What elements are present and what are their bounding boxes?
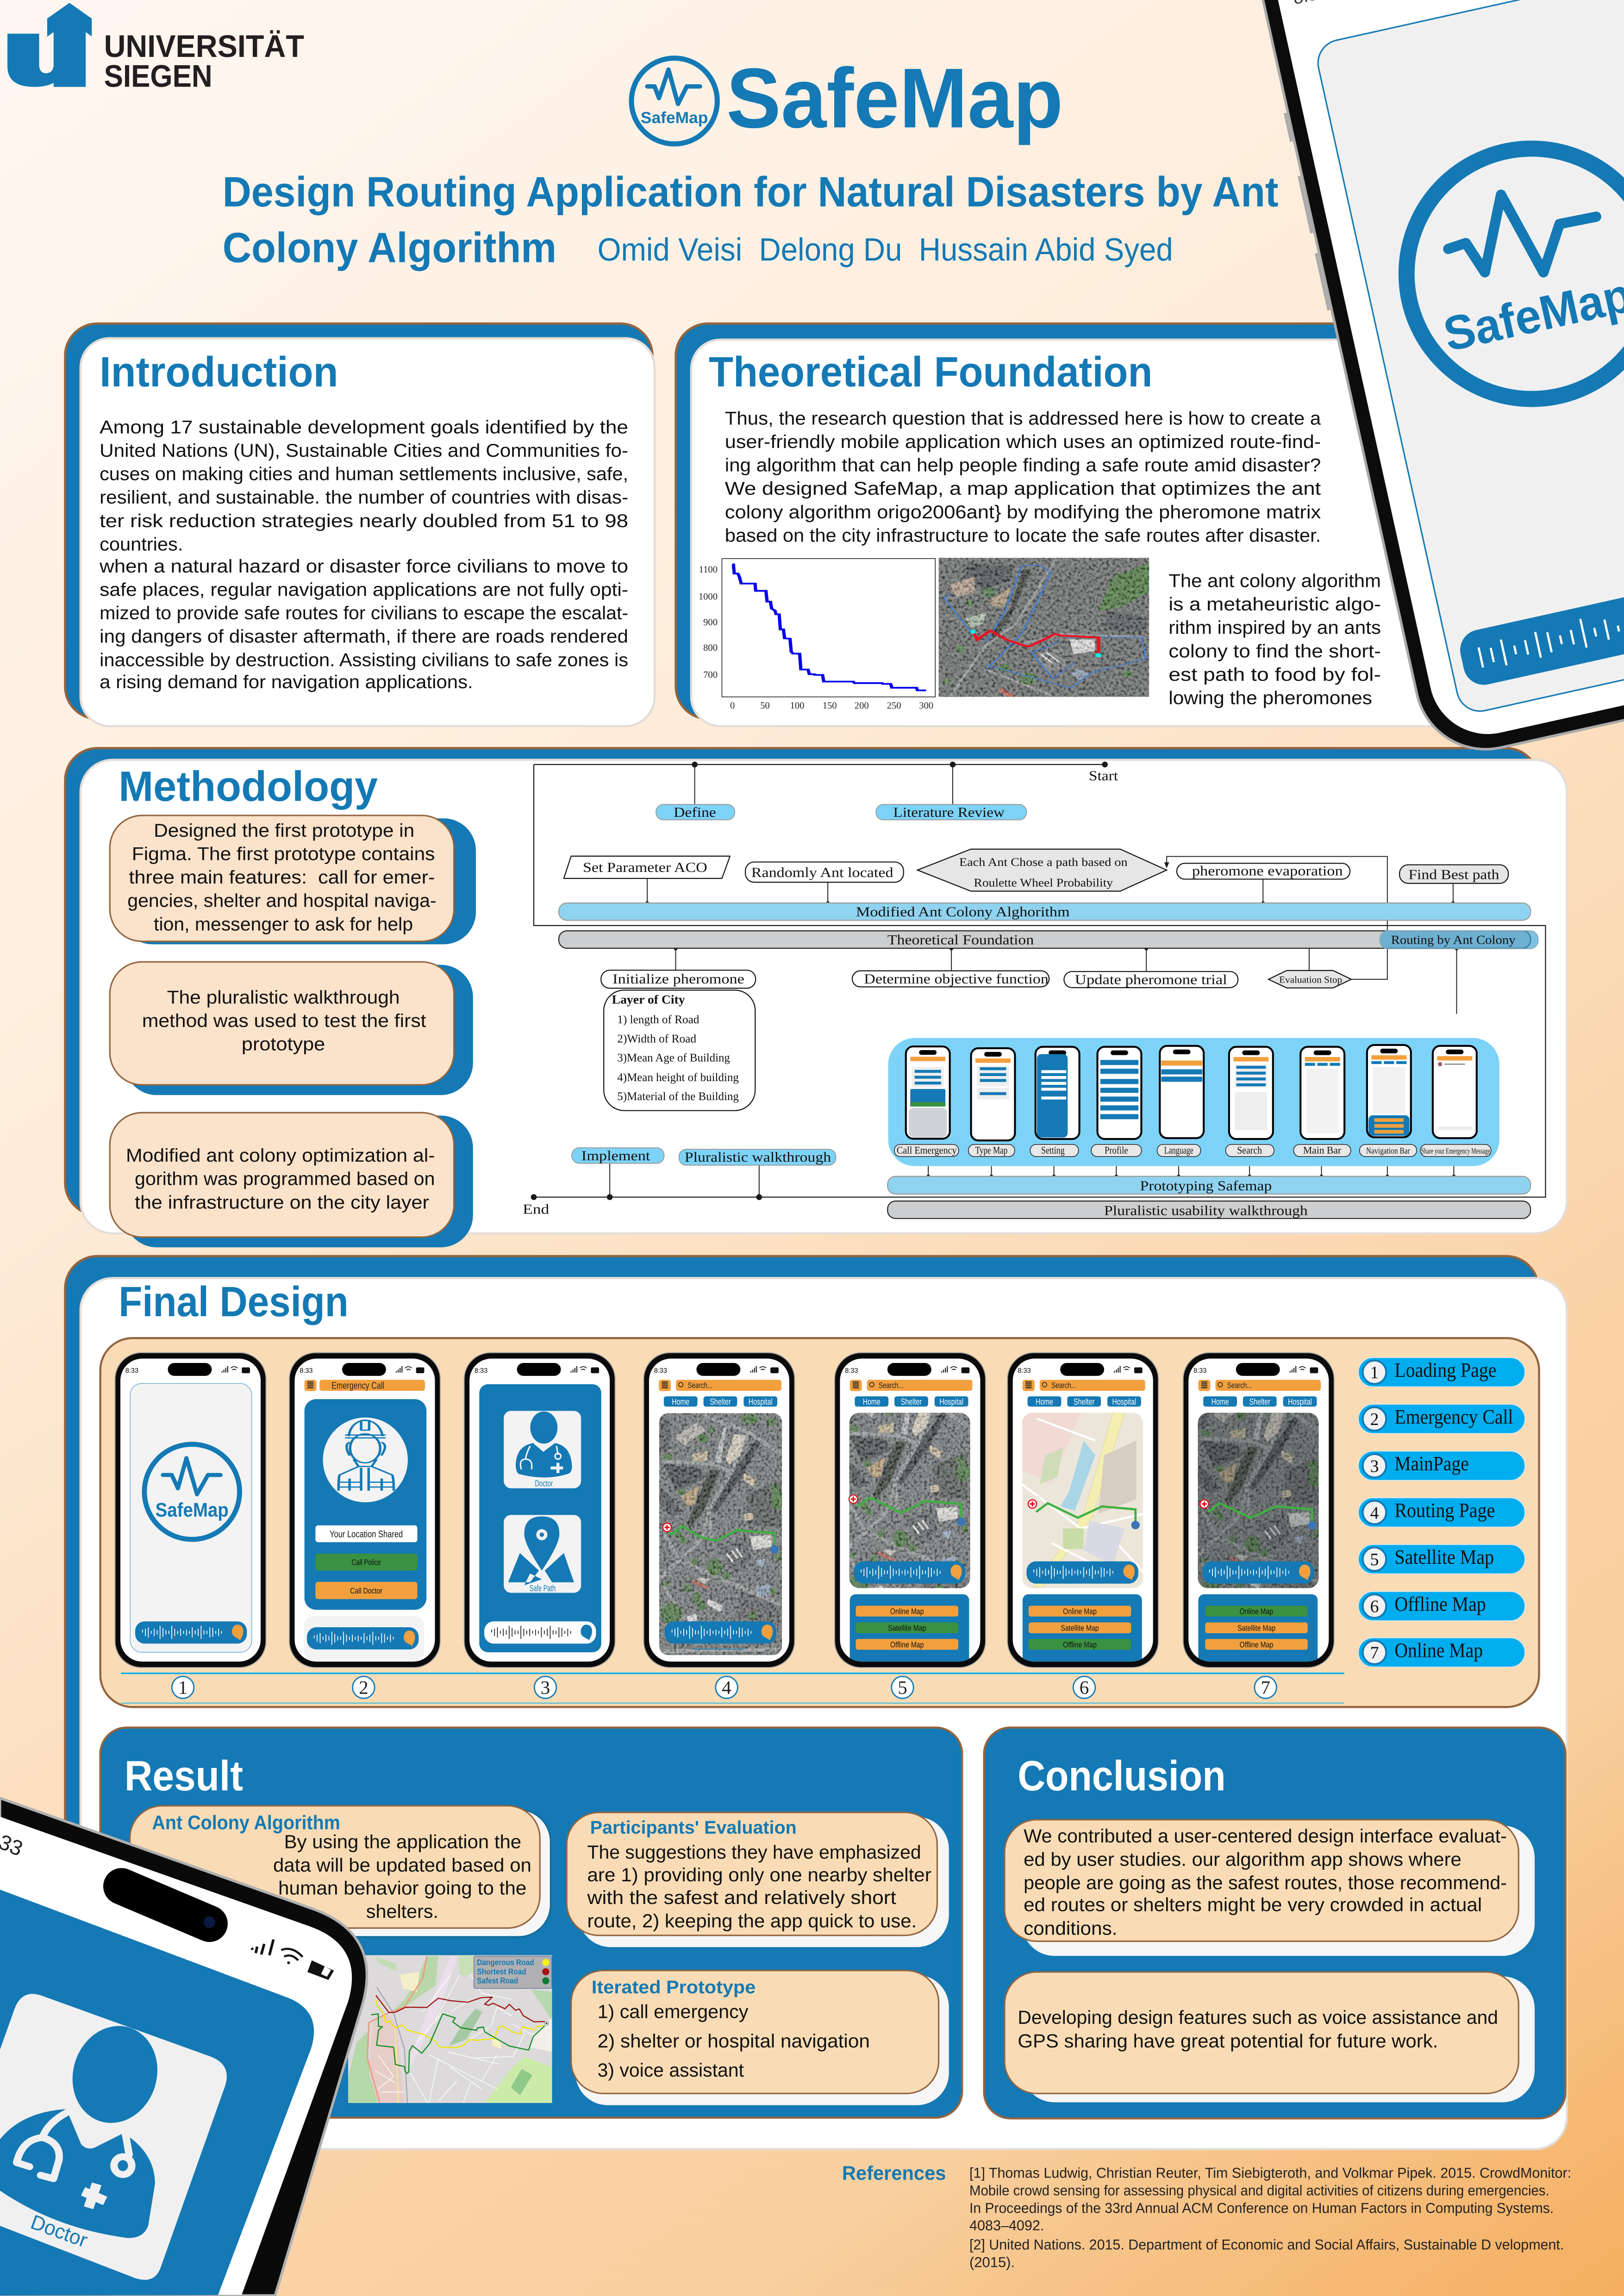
phone 3: main page: 8:33 <box>475 1367 488 1374</box>
text block: introduction body: inaccessible by destruction. Assisting civilians to safe zones is <box>100 650 628 671</box>
authors: Omid Veisi Delong Du Hussain Abid Syed <box>598 231 1173 268</box>
node: find best path: Find Best path <box>1408 869 1499 884</box>
card: ant colony algorithm: data will be updated based on <box>273 1854 531 1876</box>
phone 1: loading page <box>115 1353 266 1668</box>
node: layer of city list: Layer of City <box>612 992 686 1007</box>
chart: convergence curve: 1000 <box>699 592 718 603</box>
phone 4: routing page: 8:33 <box>654 1367 668 1374</box>
bar: routing by ant colony <box>1380 931 1538 949</box>
phone 7: online map: Hospital <box>1288 1397 1312 1407</box>
text block: research question: colony algorithm origo2006ant} by modifying the pheromone matrix <box>725 502 1322 523</box>
references list: In Proceedings of the 33rd Annual ACM Conference on Human Factors in Computing Systems. <box>969 2201 1554 2217</box>
heading: result: Result <box>125 1754 244 1801</box>
header: SafeMap logo mark and wordmark: SafeMap <box>726 51 1063 146</box>
phone 6: offline map: Satellite Map <box>1061 1625 1099 1634</box>
node: roulette decision: Each Ant Chose a path based on <box>959 856 1128 869</box>
legend: road types: Dangerous Road <box>477 1958 535 1968</box>
card: first prototype: Designed the first prototype in <box>154 821 414 841</box>
node: implement <box>572 1148 664 1164</box>
phone 5: satellite map: Home <box>863 1397 881 1407</box>
screen labels: Navigation Bar <box>1366 1148 1410 1157</box>
card: conclusion summary: conditions. <box>1024 1917 1118 1939</box>
text block: introduction body: mized to provide safe routes for civilians to escape the escalat- <box>100 603 628 624</box>
chart: convergence curve: 700 <box>703 671 718 681</box>
bar: pluralistic usability walkthrough <box>887 1201 1530 1220</box>
phone 2: emergency call: Your Location Shared <box>330 1530 403 1540</box>
label: end: End <box>523 1203 550 1218</box>
phone 5: satellite map: Hospital <box>939 1397 963 1407</box>
screen labels: Language <box>1164 1145 1193 1157</box>
doctor card <box>0 1994 227 2280</box>
node: randomly ant located: Randomly Ant located <box>751 867 893 881</box>
screen labels: Search <box>1237 1145 1262 1157</box>
phone 5: satellite map: Online Map <box>890 1608 924 1617</box>
legend: screen names: Routing Page <box>1394 1501 1495 1523</box>
panel: prototype screens <box>888 1038 1499 1166</box>
node: evaluation stop <box>1268 971 1351 988</box>
screen: type map <box>971 1048 1015 1140</box>
bar: prototyping safemap: Prototyping Safemap <box>1140 1180 1272 1195</box>
card: first prototype: three main features: call for emer- <box>129 867 435 888</box>
node: evaluation stop: Evaluation Stop <box>1279 976 1342 986</box>
card: iterated prototype: 3) voice assistant <box>598 2059 744 2081</box>
phone 2: emergency call: 8:33 <box>300 1367 313 1374</box>
bar: theoretical foundation <box>559 931 1530 949</box>
card: participants evaluation: with the safest and relatively short <box>586 1886 897 1908</box>
node: layer of city list: 4)Mean height of building <box>617 1071 739 1084</box>
screen labels: Main Bar <box>1303 1145 1342 1157</box>
card: pluralistic walkthrough: The pluralistic walkthrough <box>167 988 400 1008</box>
card: iterated prototype: Iterated Prototype <box>592 1977 756 1997</box>
chart: convergence curve: 200 <box>855 701 869 711</box>
text block: introduction body: safe places, regular navigation applications are not fully opti- <box>100 580 628 600</box>
phone 4: routing page <box>639 1353 796 1668</box>
phone 7: online map: Shelter <box>1249 1397 1270 1407</box>
header: SafeMap logo mark and wordmark: SafeMap <box>641 110 708 127</box>
phone 7: online map: Search... <box>1227 1382 1253 1391</box>
heading: methodology: Methodology <box>119 764 378 811</box>
text block: research question: based on the city infrastructure to locate the safe routes after disaster. <box>725 526 1321 546</box>
phone 7: online map <box>1177 1353 1334 1668</box>
screen number timeline: 4 <box>722 1676 732 1698</box>
references heading: References <box>842 2162 946 2184</box>
title: Colony Algorithm <box>223 225 556 272</box>
card: first prototype: tion, messenger to ask for help <box>154 914 413 935</box>
node: initialize pheromone <box>601 970 756 988</box>
phone 6: offline map: Online Map <box>1063 1608 1097 1617</box>
references list <box>969 2166 1571 2271</box>
card: modified ant colony: Modified ant colony optimization al- <box>126 1145 435 1166</box>
title: Design Routing Application for Natural Disasters by Ant <box>223 170 1279 217</box>
references list: [2] United Nations. 2015. Department of Economic and Social Affairs, Sustainable D velopment. <box>969 2238 1564 2254</box>
diagram: methodology flow <box>523 762 1545 1220</box>
card: participants evaluation: Participants' Evaluation <box>590 1817 797 1838</box>
screen number timeline: 2 <box>359 1676 369 1698</box>
card: conclusion summary: people are going as the safest routes, those recommend- <box>1024 1872 1507 1894</box>
phone 5: satellite map: Satellite Map <box>888 1625 926 1634</box>
legend: screen names: Online Map <box>1394 1641 1483 1663</box>
heading: conclusion: Conclusion <box>1018 1754 1226 1801</box>
node: set parameter ACO: Set Parameter ACO <box>583 862 707 877</box>
screen: call emergency <box>906 1046 950 1139</box>
node: determine objective function: Determine objective function <box>864 973 1049 988</box>
node: literature review <box>876 804 1026 821</box>
card: pluralistic walkthrough: prototype <box>242 1034 325 1055</box>
chart: convergence curve: 250 <box>887 701 901 711</box>
text block: research question: user-friendly mobile application which uses an optimized route-find- <box>725 432 1321 453</box>
phone 4: routing page: Shelter <box>710 1397 731 1407</box>
node: layer of city list <box>604 990 755 1111</box>
phone mockup: top right loading screen <box>1225 0 1624 764</box>
phone 2: emergency call: Emergency Call <box>331 1381 385 1392</box>
node: literature review: Literature Review <box>893 807 1005 821</box>
node: layer of city list: 2)Width of Road <box>617 1032 696 1045</box>
card: ant colony algorithm: By using the application the <box>284 1831 521 1853</box>
text block: ant colony description: lowing the pheromones <box>1168 688 1372 709</box>
references list: 4083–4092. <box>969 2219 1044 2235</box>
screen labels: Share your Emergency Message <box>1421 1148 1491 1157</box>
phone 5: satellite map: Shelter <box>901 1397 922 1407</box>
node: set parameter ACO <box>564 856 730 878</box>
node: update pheromone trial <box>1064 971 1238 989</box>
phone 6: offline map: Shelter <box>1074 1397 1094 1407</box>
screen: language <box>1160 1046 1204 1138</box>
bar: modified ant colony algorithm <box>559 903 1530 921</box>
screen: navigation bar <box>1367 1045 1411 1137</box>
phone 4: routing page: Search... <box>687 1382 713 1391</box>
phone 2: emergency call <box>289 1353 440 1668</box>
card: participants evaluation <box>567 1812 949 1947</box>
text block: ant colony description <box>1168 571 1381 709</box>
phone 1: loading page: SafeMap <box>156 1499 229 1521</box>
text block: introduction body <box>98 417 628 692</box>
notch <box>122 1886 215 1928</box>
references list: (2015). <box>969 2255 1015 2271</box>
card: participants evaluation: The suggestions they have emphasized <box>587 1841 921 1863</box>
legend: screen names: 6 <box>1370 1596 1379 1617</box>
card: conclusion summary <box>1005 1820 1535 1956</box>
text block: ant colony description: rithm inspired by an ants <box>1168 618 1381 638</box>
node: layer of city list: 5)Material of the Building <box>617 1090 739 1103</box>
text block: research question <box>725 409 1322 546</box>
phone 7: online map: Offline Map <box>1240 1642 1273 1650</box>
node: define <box>656 804 735 821</box>
chart: convergence curve: 0 <box>730 701 735 711</box>
card: first prototype: gencies, shelter and hospital naviga- <box>127 891 437 911</box>
card: first prototype: Figma. The first prototype contains <box>132 844 435 865</box>
text block: research question: ing algorithm that can help people finding a safe route amid disaster? <box>725 455 1321 476</box>
node: roulette decision: Roulette Wheel Probability <box>974 876 1113 890</box>
card: future work <box>1005 1972 1535 2102</box>
legend: screen names: 1 <box>1370 1362 1379 1383</box>
legend: screen names: Emergency Call <box>1394 1407 1513 1430</box>
icon: safemap logo on phone <box>1406 149 1624 399</box>
panel: conclusion <box>984 1728 1565 2118</box>
phone 6: offline map: Hospital <box>1112 1397 1136 1407</box>
legend: screen names: 2 <box>1370 1409 1379 1430</box>
text block: introduction body: cuses on making cities and human settlements inclusive, safe, <box>100 464 628 485</box>
panel: theoretical foundation <box>675 322 1432 728</box>
phone 7: online map: 8:33 <box>1193 1367 1207 1374</box>
screen: main bar <box>1300 1047 1344 1139</box>
bar: modified ant colony algorithm: Modified Ant Colony Alghorithm <box>856 906 1071 921</box>
node: pheromone evaporation: pheromone evaporation <box>1192 865 1343 880</box>
screen number timeline <box>121 1674 1344 1703</box>
legend: screen names: 3 <box>1370 1456 1379 1476</box>
chart: convergence curve: 1100 <box>699 565 718 575</box>
legend: road types: Safest Road <box>477 1976 519 1986</box>
phone 7: online map: Satellite Map <box>1237 1625 1275 1634</box>
connector dots <box>531 762 1458 1200</box>
legend: screen names: MainPage <box>1394 1454 1469 1476</box>
phone 3: main page: Safe Path <box>530 1584 556 1594</box>
panel: methodology <box>65 748 1567 1247</box>
screen labels: Profile <box>1105 1145 1128 1157</box>
card: ant colony algorithm <box>130 1806 550 1937</box>
text block: research question: Thus, the research question that is addressed here is how to create a <box>725 409 1322 429</box>
card: modified ant colony <box>110 1113 473 1247</box>
phone 4: routing page: Home <box>672 1397 690 1407</box>
text block: ant colony description: est path to food by fol- <box>1168 665 1381 685</box>
panel: result <box>100 1728 962 2118</box>
phone 5: satellite map: Search... <box>879 1382 904 1391</box>
phone 6: offline map: Offline Map <box>1063 1642 1097 1650</box>
node: update pheromone trial: Update pheromone trial <box>1075 974 1228 989</box>
panel: app screens <box>100 1338 1539 1707</box>
node: implement: Implement <box>581 1150 651 1164</box>
references list: Mobile crowd sensing for assessing physical and digital activities of citizens during emergencies. <box>969 2184 1549 2200</box>
screen number timeline: 5 <box>898 1676 907 1698</box>
legend: screen names: 4 <box>1370 1502 1379 1523</box>
screen labels <box>894 1145 1491 1157</box>
card: iterated prototype: 1) call emergency <box>598 2001 749 2022</box>
screen number timeline: 3 <box>541 1676 550 1698</box>
card: conclusion summary: We contributed a user-centered design interface evaluat- <box>1024 1825 1507 1847</box>
card: ant colony algorithm: shelters. <box>366 1900 438 1922</box>
text block: introduction body: ter risk reduction strategies nearly doubled from 51 to 98 <box>100 511 628 531</box>
screen number timeline: 1 <box>178 1676 187 1698</box>
legend: screen names: 5 <box>1370 1549 1379 1570</box>
card: participants evaluation: route, 2) keeping the app quick to use. <box>587 1910 917 1932</box>
doctor card: Doctor <box>28 2210 91 2252</box>
node: initialize pheromone: Initialize pheromone <box>612 973 744 988</box>
card: ant colony algorithm: Ant Colony Algorithm <box>152 1812 340 1834</box>
logo: Universität Siegen: SIEGEN <box>104 59 212 94</box>
card: pluralistic walkthrough <box>110 962 473 1095</box>
text block: introduction body: United Nations (UN), Sustainable Cities and Communities fo- <box>100 441 628 461</box>
card: modified ant colony: gorithm was programmed based on <box>135 1169 435 1189</box>
node: randomly ant located <box>745 862 904 882</box>
card: iterated prototype: 2) shelter or hospital navigation <box>598 2030 870 2052</box>
text block: introduction body: countries. <box>100 535 183 555</box>
card: modified ant colony: the infrastructure on the city layer <box>135 1193 430 1213</box>
heading: final design: Final Design <box>119 1280 349 1326</box>
node: roulette decision <box>918 849 1167 891</box>
phone 6: offline map: Search... <box>1051 1382 1077 1391</box>
bar: pluralistic usability walkthrough: Pluralistic usability walkthrough <box>1104 1205 1308 1220</box>
screen: emergency message <box>1433 1046 1477 1138</box>
text block: introduction body: a rising demand for navigation applications. <box>100 672 473 692</box>
phone 4: routing page: Hospital <box>749 1397 773 1407</box>
text block: introduction body: when a natural hazard or disaster force civilians to move to <box>98 556 628 577</box>
card: conclusion summary: ed routes or shelters might be very crowded in actual <box>1024 1894 1482 1916</box>
legend: screen names: Offline Map <box>1394 1595 1486 1617</box>
heading: introduction: Introduction <box>100 350 338 397</box>
title <box>223 170 1279 272</box>
card: conclusion summary: ed by user studies. our algorithm app shows where <box>1024 1848 1462 1870</box>
node: layer of city list: 1) length of Road <box>617 1013 699 1026</box>
screen labels: Call Emergency <box>897 1145 957 1157</box>
panel: introduction <box>65 324 655 726</box>
chart: convergence curve <box>699 559 935 711</box>
status icons <box>252 1940 334 1980</box>
node: define: Define <box>674 807 716 821</box>
label: start: Start <box>1089 770 1118 785</box>
screen number timeline: 6 <box>1080 1676 1090 1698</box>
screen number timeline: 7 <box>1261 1676 1271 1698</box>
text block: ant colony description: colony to find the short- <box>1168 641 1381 662</box>
text block: ant colony description: The ant colony algorithm <box>1168 571 1381 591</box>
connector lines <box>534 764 1545 1197</box>
screen: setting <box>1036 1047 1080 1139</box>
screen labels: Setting <box>1041 1145 1065 1157</box>
phone 2: emergency call: Call Doctor <box>350 1588 382 1597</box>
legend: screen names: Loading Page <box>1394 1361 1496 1383</box>
phone 6: offline map <box>1007 1353 1158 1668</box>
references list: [1] Thomas Ludwig, Christian Reuter, Tim Siebigteroth, and Volkmar Pipek. 2015. CrowdMonitor: <box>969 2166 1571 2182</box>
map: aerial route <box>939 558 1149 697</box>
phone 6: offline map: Home <box>1036 1397 1054 1407</box>
phone 7: online map: Online Map <box>1240 1608 1273 1617</box>
logo: Universität Siegen: UNIVERSITÄT <box>104 29 304 64</box>
card: pluralistic walkthrough: method was used to test the first <box>142 1011 427 1032</box>
phone 5: satellite map: 8:33 <box>845 1367 859 1374</box>
legend: road types <box>474 1956 552 1988</box>
legend: screen names: 7 <box>1370 1643 1379 1663</box>
chart: convergence curve: 800 <box>703 643 718 653</box>
bar: routing by ant colony: Routing by Ant Colony <box>1391 932 1517 947</box>
text block: ant colony description: is a metaheuristic algo- <box>1168 594 1381 615</box>
heading: theoretical foundation: Theoretical Foundation <box>709 350 1152 397</box>
bar: prototyping safemap <box>887 1176 1530 1195</box>
panel: final design <box>65 1256 1567 2149</box>
chart: convergence curve: 900 <box>703 618 718 628</box>
node: pheromone evaporation <box>1177 863 1350 880</box>
chart: convergence curve: 150 <box>823 701 837 711</box>
phone 5: satellite map <box>825 1353 986 1668</box>
text block: introduction body: ing dangers of disaster aftermath, if there are roads rendered <box>100 627 628 647</box>
legend: screen names <box>1358 1357 1525 1667</box>
phone 2: emergency call: Call Police <box>351 1559 381 1568</box>
screen labels: Type Map <box>975 1145 1008 1157</box>
map: road comparison <box>348 1955 552 2103</box>
logo: Universität Siegen <box>7 3 304 94</box>
phone 5: satellite map: Offline Map <box>890 1642 924 1650</box>
phone 7: online map: Home <box>1212 1397 1230 1407</box>
legend: screen names: Satellite Map <box>1394 1548 1494 1570</box>
phone 1: loading page: 8:33 <box>125 1367 139 1374</box>
screen: search <box>1229 1047 1273 1139</box>
chart: convergence curve: 300 <box>919 701 933 711</box>
phone 3: main page <box>464 1353 615 1668</box>
text block: introduction body: Among 17 sustainable development goals identified by the <box>100 417 628 438</box>
node: pluralistic walkthrough: Pluralistic walkthrough <box>685 1151 831 1166</box>
phone 3: main page: Doctor <box>535 1479 553 1489</box>
bar: theoretical foundation: Theoretical Foundation <box>887 934 1034 949</box>
text block: introduction body: resilient, and sustainable. the number of countries with disas- <box>100 487 628 508</box>
card: iterated prototype <box>571 1971 949 2105</box>
phone 6: offline map: 8:33 <box>1018 1367 1031 1374</box>
legend: road types: Shortest Road <box>477 1967 527 1977</box>
card: future work: Developing design features such as voice assistance and <box>1018 2006 1498 2028</box>
node: find best path <box>1399 865 1508 884</box>
card: future work: GPS sharing have great potential for future work. <box>1018 2030 1438 2052</box>
card: participants evaluation: are 1) providing only one nearby shelter <box>587 1864 932 1885</box>
card: first prototype <box>110 815 476 944</box>
screen: profile <box>1098 1047 1141 1139</box>
text block: research question: We designed SafeMap, a map application that optimizes the ant <box>725 479 1322 499</box>
chart: convergence curve: 50 <box>760 701 770 711</box>
phone mockup: bottom left doctor screen <box>0 1798 384 2296</box>
chart: convergence curve: 100 <box>790 701 804 711</box>
card: ant colony algorithm: human behavior going to the <box>278 1877 526 1899</box>
node: layer of city list: 3)Mean Age of Building <box>617 1051 730 1064</box>
